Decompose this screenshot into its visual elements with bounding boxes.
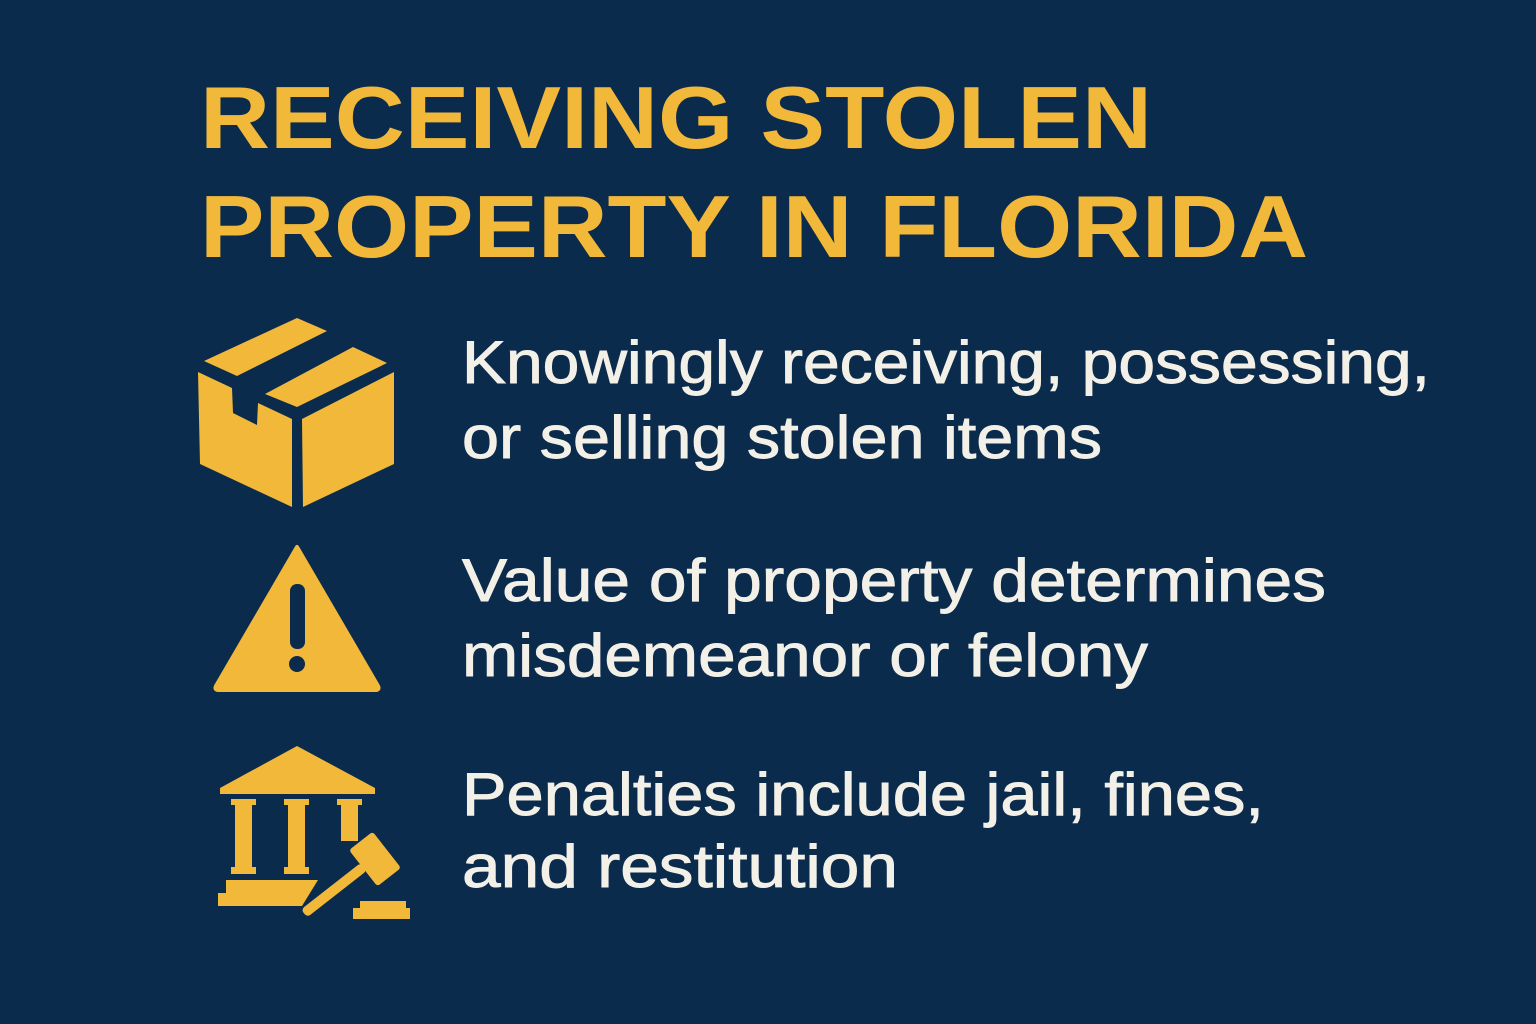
title: RECEIVING STOLEN [200, 68, 1152, 167]
text: point 2: Value of property determines [462, 547, 1326, 614]
title: PROPERTY IN FLORIDA [200, 177, 1308, 276]
text blocks [462, 329, 1430, 900]
icon: courthouse with gavel [218, 746, 410, 919]
text: point 2: misdemeanor or felony [462, 622, 1148, 689]
text: point 3: Penalties include jail, fines, [462, 761, 1264, 828]
title [200, 68, 1308, 276]
text: point 1 [462, 329, 1430, 471]
text: point 2 [462, 547, 1326, 689]
icon: warning triangle [215, 547, 379, 690]
text: point 1: Knowingly receiving, possessing, [462, 329, 1430, 396]
icon: box [198, 318, 394, 507]
text: point 3 [462, 761, 1264, 900]
text: point 3: and restitution [462, 833, 898, 900]
text: point 1: or selling stolen items [462, 404, 1102, 471]
